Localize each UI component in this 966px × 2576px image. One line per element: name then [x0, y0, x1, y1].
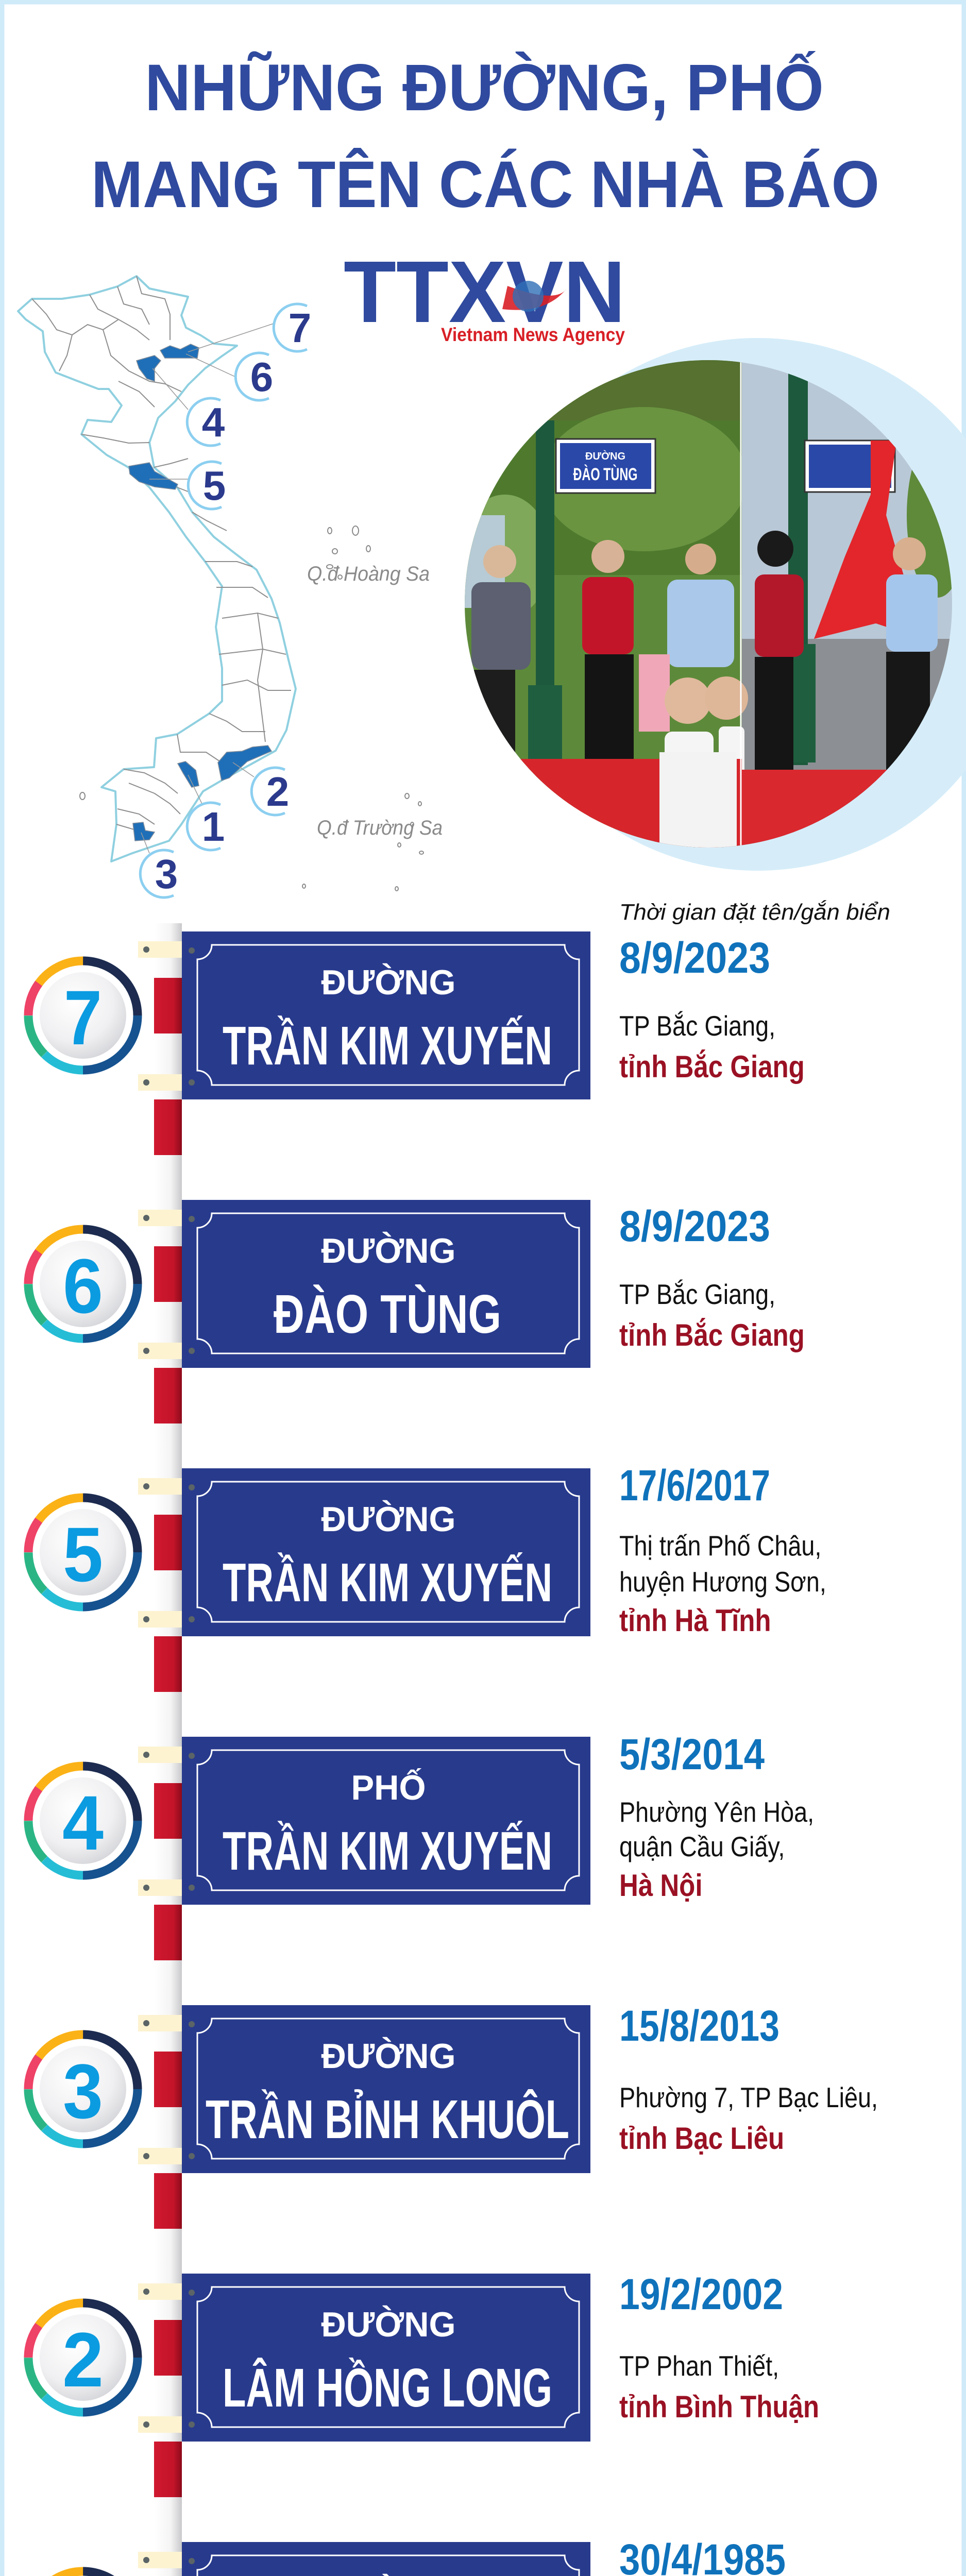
badge 7 — [6, 938, 160, 1093]
map markers: numbers: 7 — [289, 305, 311, 351]
badge 2: 2 — [62, 2316, 104, 2403]
map markers: numbers: 1 — [202, 804, 225, 850]
sign 2 — [138, 2274, 590, 2442]
sign 6: ĐƯỜNG — [321, 1231, 455, 1270]
info 4: 5/3/2014 — [619, 1730, 765, 1778]
info 6 — [619, 1202, 805, 1352]
info 6: TP Bắc Giang, — [619, 1278, 775, 1310]
sign 5: TRẦN KIM XUYẾN — [223, 1552, 552, 1613]
map markers: numbers: 6 — [250, 354, 273, 400]
badge 6: 6 — [63, 1243, 103, 1329]
map: Vietnam — [18, 276, 443, 891]
info 5: Thị trấn Phố Châu, — [619, 1530, 821, 1562]
photo: inauguration ceremony — [459, 338, 966, 871]
map markers: numbers: 5 — [203, 463, 226, 509]
info 4: quận Cầu Giấy, — [619, 1831, 785, 1862]
sign 4: PHỐ — [351, 1768, 426, 1807]
info 4: Phường Yên Hòa, — [619, 1796, 814, 1828]
badge 3: 3 — [63, 2048, 103, 2134]
sign 2: ĐƯỜNG — [321, 2305, 455, 2344]
badge 7: 7 — [64, 974, 102, 1061]
column heading: Thời gian đặt tên/gắn biển — [619, 900, 890, 925]
title: MANG TÊN CÁC NHÀ BÁO — [91, 148, 879, 222]
info 5: huyện Hương Sơn, — [619, 1566, 826, 1598]
item 7 — [6, 931, 805, 1099]
info 6: 8/9/2023 — [619, 1202, 770, 1250]
photo: inauguration ceremony: ĐƯỜNG — [585, 450, 625, 462]
sign 7: ĐƯỜNG — [321, 963, 455, 1002]
info 5: tỉnh Hà Tĩnh — [619, 1603, 771, 1638]
pole — [154, 923, 182, 2576]
item 3 — [6, 2002, 878, 2173]
item 5 — [6, 1461, 826, 1638]
info 3: 15/8/2013 — [619, 2002, 779, 2050]
item 4 — [6, 1730, 814, 1905]
info 4 — [619, 1730, 814, 1903]
logo: TTXVN: Vietnam News Agency — [441, 324, 625, 345]
info 5: 17/6/2017 — [619, 1461, 770, 1510]
title: NHỮNG ĐƯỜNG, PHỐ — [145, 51, 824, 125]
info 2: tỉnh Bình Thuận — [619, 2389, 819, 2424]
sign 6 — [138, 1200, 590, 1368]
item 6 — [6, 1200, 805, 1368]
info 2: TP Phan Thiết, — [619, 2350, 779, 2382]
badge 4 — [6, 1743, 160, 1898]
sign 6: ĐÀO TÙNG — [274, 1284, 501, 1345]
info 4: Hà Nội — [619, 1868, 702, 1903]
info 3: Phường 7, TP Bạc Liêu, — [619, 2081, 878, 2113]
map markers: numbers: 2 — [266, 769, 289, 815]
info 3: tỉnh Bạc Liêu — [619, 2121, 784, 2156]
sign 2: LÂM HỒNG LONG — [223, 2357, 552, 2418]
map markers: numbers: 4 — [202, 399, 225, 445]
badge 3 — [6, 2012, 160, 2166]
info 2 — [619, 2270, 819, 2424]
badge 4: 4 — [62, 1780, 104, 1866]
sign 1 — [138, 2542, 590, 2576]
info 7: tỉnh Bắc Giang — [619, 1049, 805, 1084]
map markers: numbers — [140, 304, 320, 897]
info 2: 19/2/2002 — [619, 2270, 783, 2318]
sign 5: ĐƯỜNG — [321, 1500, 455, 1539]
item 1 — [6, 2535, 813, 2576]
info 7 — [619, 934, 805, 1084]
badge 2 — [6, 2280, 160, 2435]
sign 5 — [138, 1468, 590, 1636]
sign 3 — [138, 2005, 590, 2173]
map markers: numbers: 3 — [155, 851, 178, 897]
badge 6 — [6, 1207, 160, 1361]
badge 5: 5 — [63, 1511, 103, 1598]
sign 4: TRẦN KIM XUYẾN — [223, 1821, 552, 1882]
title — [91, 51, 879, 222]
info 3 — [619, 2002, 878, 2156]
photo: inauguration ceremony: ĐÀO TÙNG — [573, 465, 638, 484]
info 5 — [619, 1461, 826, 1638]
sign 4 — [138, 1737, 590, 1905]
badge 5 — [6, 1475, 160, 1630]
sign 3: ĐƯỜNG — [321, 2037, 455, 2076]
info 6: tỉnh Bắc Giang — [619, 1318, 805, 1352]
badge 1 — [6, 2549, 160, 2576]
item 2 — [6, 2270, 819, 2442]
sign 7: TRẦN KIM XUYẾN — [223, 1015, 552, 1076]
sign 3: TRẦN BỈNH KHUÔL — [206, 2089, 569, 2150]
map: Vietnam: Q.đ Trường Sa — [317, 817, 443, 839]
map: Vietnam: Q.đ Hoàng Sa — [307, 563, 430, 585]
sign 7 — [138, 931, 590, 1099]
info 7: TP Bắc Giang, — [619, 1010, 775, 1042]
info 7: 8/9/2023 — [619, 934, 770, 982]
logo: TTXVN: TTXVN — [344, 243, 625, 341]
